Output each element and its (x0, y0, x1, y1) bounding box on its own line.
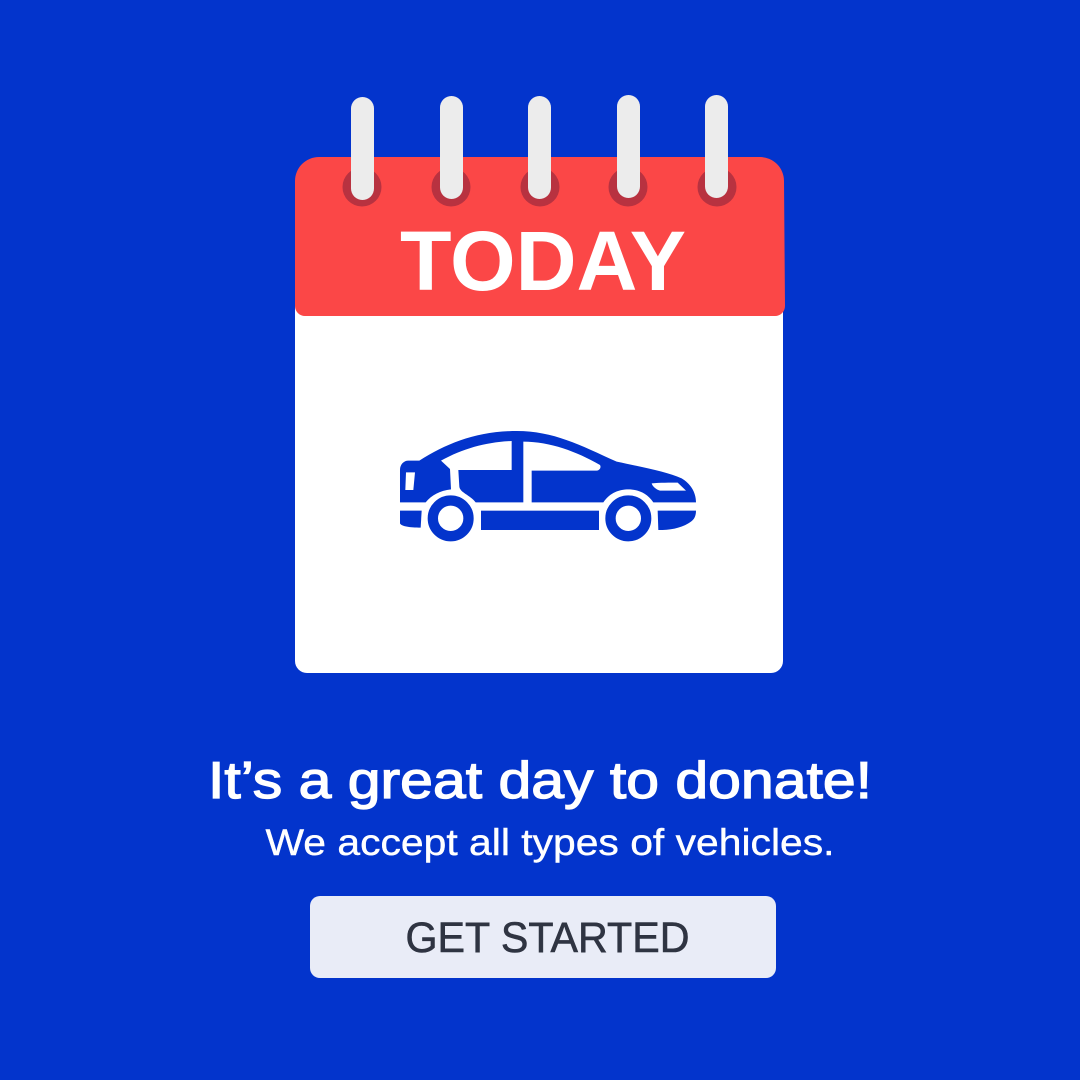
button: get started (310, 896, 776, 978)
headline: It’s a great day to donate! (208, 752, 872, 810)
binding holes (342, 168, 736, 206)
icon: car (400, 431, 696, 536)
button: get started: GET STARTED (406, 914, 690, 962)
today label: TODAY (400, 214, 686, 308)
calendar (295, 95, 785, 673)
calendar page (295, 300, 783, 673)
binding rings (351, 95, 728, 200)
calendar header (295, 157, 785, 316)
subheading: We accept all types of vehicles. (266, 822, 834, 863)
